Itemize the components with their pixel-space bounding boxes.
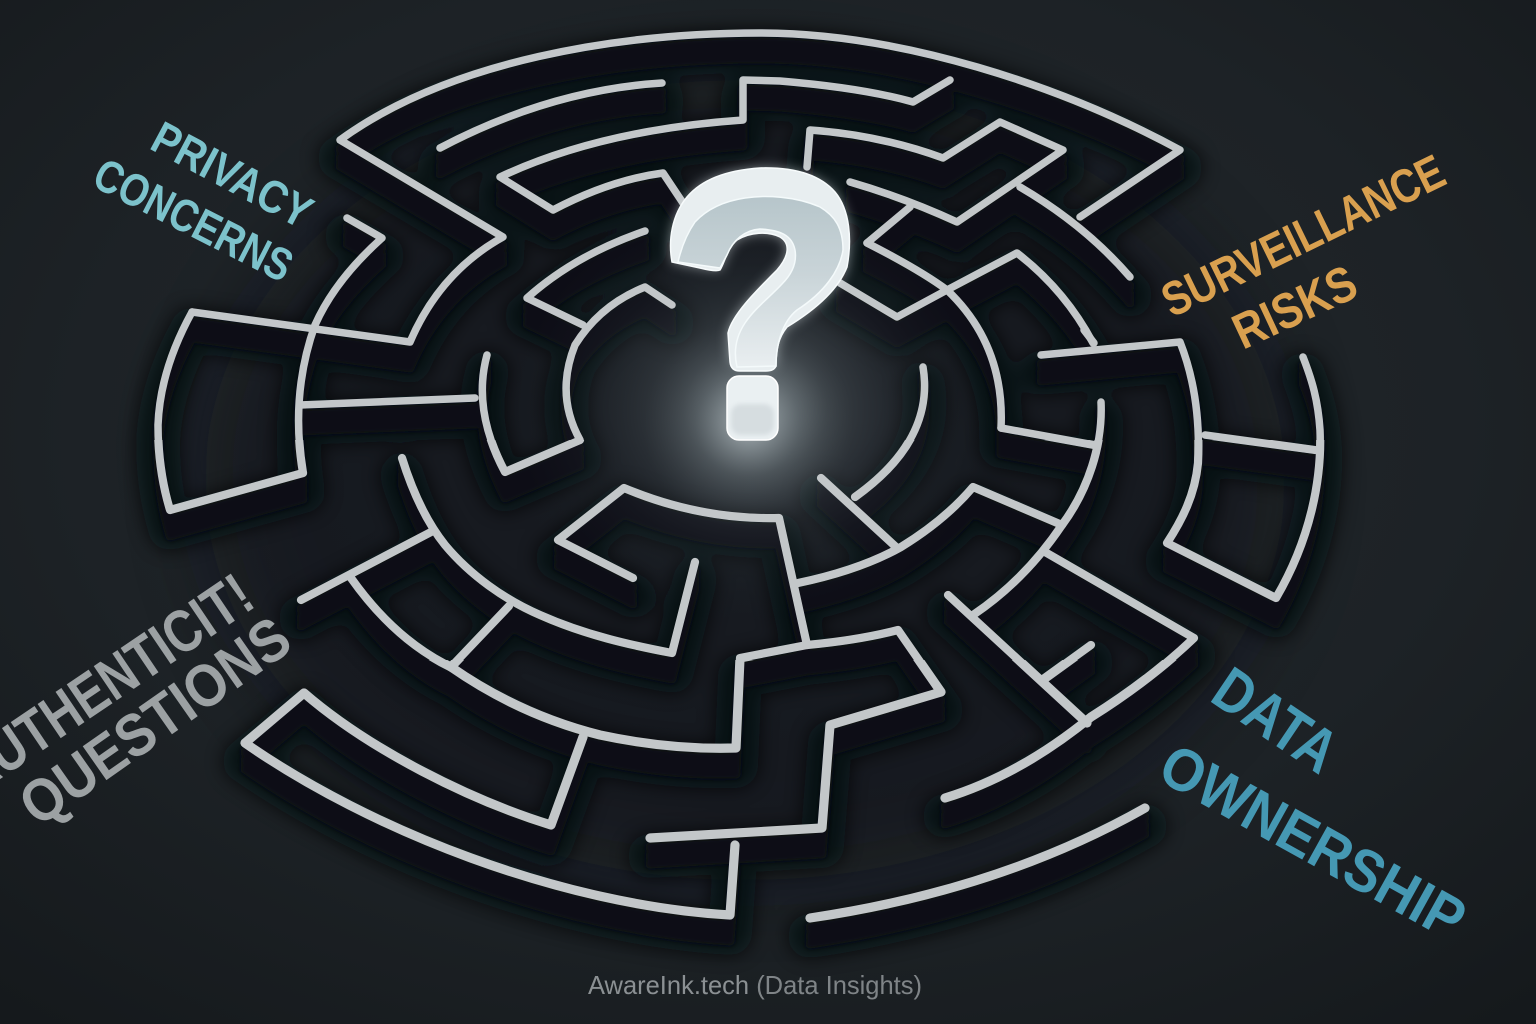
- central floor glow: [515, 200, 995, 620]
- question mark front face: [678, 197, 843, 367]
- maze walls: [158, 33, 1320, 918]
- label line: ownership: OWNERSHIP: [1149, 731, 1477, 953]
- label line: concerns: CONCERNS: [85, 148, 302, 292]
- glowing question mark: [671, 168, 849, 440]
- label line: risks: RISKS: [1224, 254, 1365, 360]
- label line: surveillance: SURVEILLANCE: [1154, 145, 1454, 328]
- footer credit: AwareInk.tech (Data Insights): [588, 970, 922, 1000]
- maze floor darkening: [205, 80, 1285, 880]
- glow beneath the dot: [643, 320, 853, 530]
- question mark halo: [671, 168, 849, 366]
- question mark body: [671, 168, 849, 371]
- label line: questions: QUESTIONS: [7, 604, 303, 839]
- question mark dot base shade: [731, 404, 774, 435]
- label line: data: DATA: [1200, 654, 1351, 787]
- label: privacy concerns: [85, 111, 321, 292]
- label: surveillance risks: [1154, 145, 1454, 360]
- label: data ownership: [1149, 654, 1477, 953]
- question mark dot: [727, 376, 778, 440]
- label: authenticity questions: [0, 561, 303, 839]
- label line: privacy: PRIVACY: [143, 111, 321, 239]
- maze wall shadows: [158, 42, 1320, 944]
